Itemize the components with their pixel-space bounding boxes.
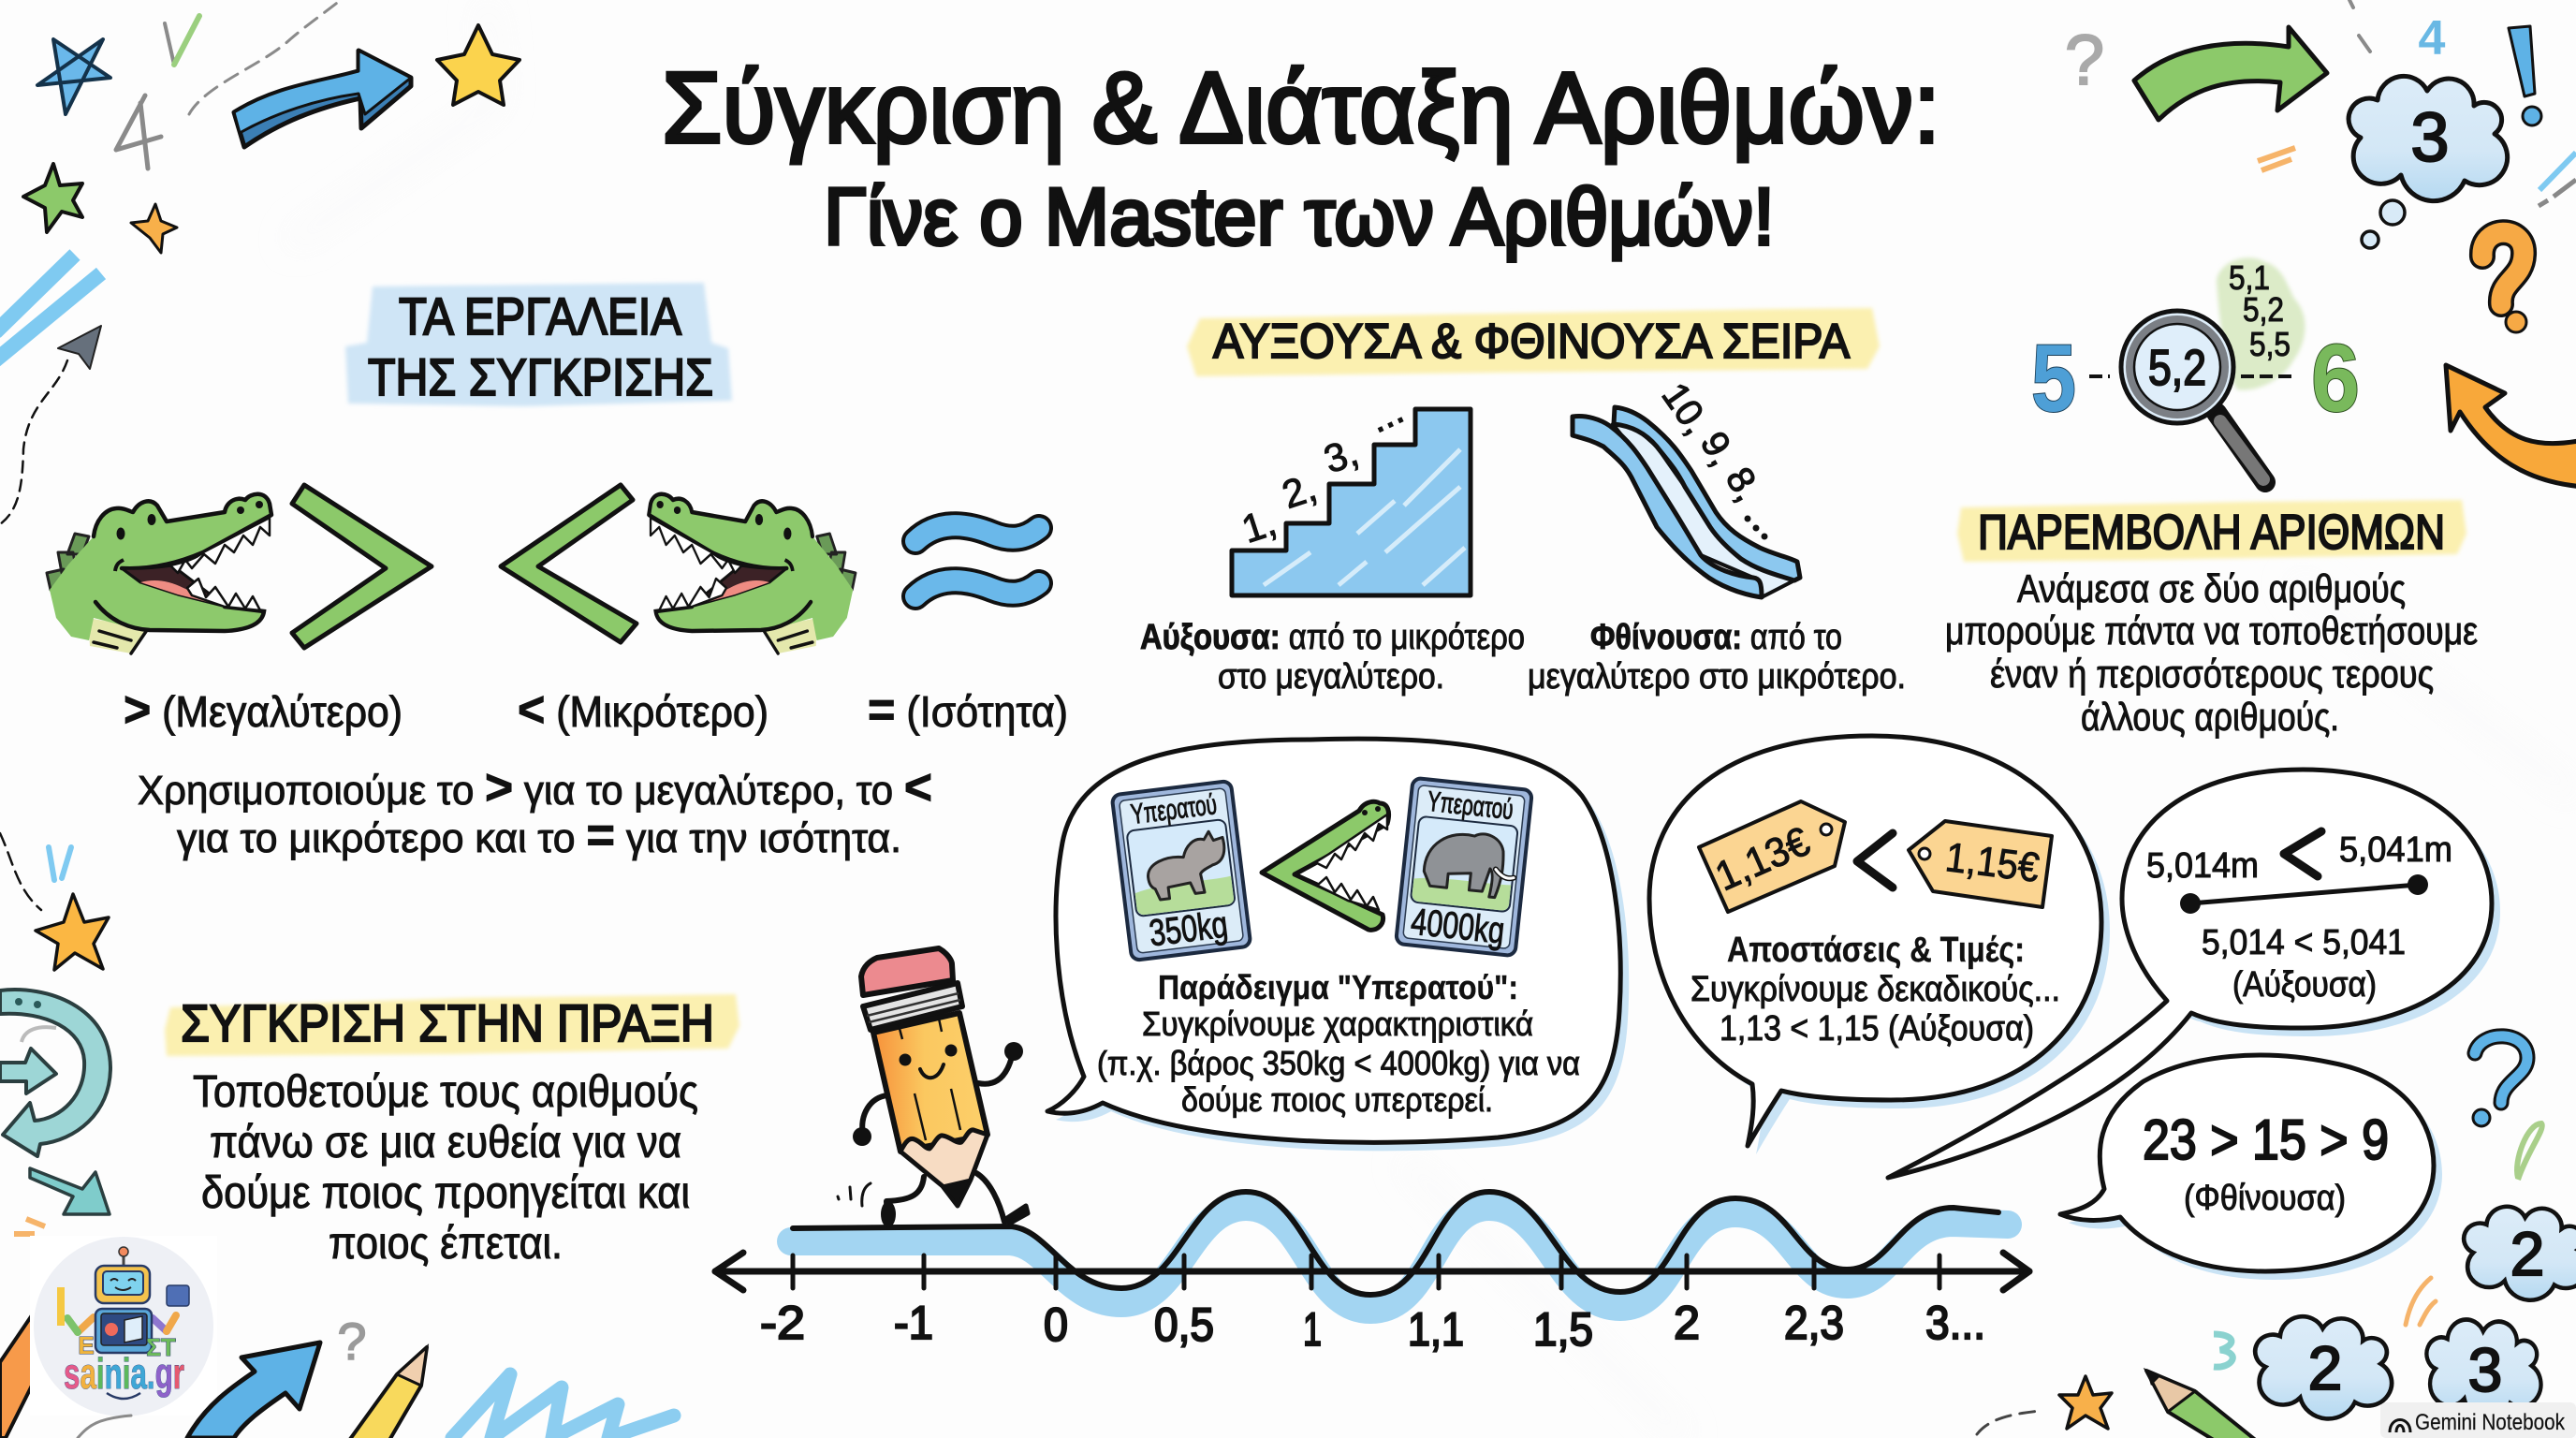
chart: number line with wave <box>715 1192 2029 1356</box>
text: practice explanation: δούμε ποιος προηγείται και <box>201 1168 690 1218</box>
text: interpolation explanation: Ανάμεσα σε δύο αριθμούς <box>2017 566 2406 610</box>
text: ascending <box>1140 618 1525 697</box>
bubble text <box>1690 931 2060 1049</box>
text: interpolation explanation <box>1945 566 2478 739</box>
teal squiggle <box>2214 1334 2232 1367</box>
numbers in blob: 5,5 <box>2249 325 2291 363</box>
text: practice explanation <box>193 1067 698 1269</box>
icon: orange star <box>131 204 177 253</box>
bubble text <box>2202 923 2406 1005</box>
heading: tools: ΤΗΣ ΣΥΓΚΡΙΣΗΣ <box>368 347 713 406</box>
axis labels: 2,3 <box>1784 1297 1844 1349</box>
icon: blue arrow <box>234 51 411 147</box>
text: ascending: στο μεγαλύτερο. <box>1218 657 1444 697</box>
heading: tools <box>345 283 732 406</box>
bubble text: 1,13 < 1,15 (Αύξουσα) <box>1720 1009 2034 1049</box>
icon: green star <box>23 164 82 232</box>
text: practice explanation: ποιος έπεται. <box>329 1219 563 1269</box>
icon: staircase <box>1232 388 1471 595</box>
card: elephant <box>1396 778 1532 956</box>
decorations: bottom left <box>78 1312 674 1438</box>
icon: orange question mark <box>2482 232 2526 332</box>
robot <box>61 1247 189 1353</box>
icon: number six: 6 <box>2311 325 2360 432</box>
axis labels: -1 <box>894 1297 933 1349</box>
orange dashes <box>14 1219 45 1234</box>
callout: distances and prices bubble <box>1649 736 2110 1154</box>
icon: blue question mark <box>2473 1036 2527 1126</box>
bubble text: Αποστάσεις & Τιμές: <box>1727 931 2025 970</box>
black wave <box>793 1192 1998 1295</box>
price tag left: 1,13€ <box>1709 818 1816 900</box>
axis labels <box>760 1297 1985 1356</box>
icon: crocodile facing left <box>649 493 856 653</box>
icon: green arrow <box>2134 27 2327 120</box>
icon: teal arrow <box>30 1168 110 1214</box>
text: interpolation explanation: μπορούμε πάντα να τοποθετήσουμε <box>1945 609 2478 653</box>
panel: ascending and descending order <box>1140 308 1906 697</box>
icon: magnifier <box>2121 311 2265 482</box>
segment comparison: 5,014m <box>2146 846 2259 886</box>
text: ascending: Αύξουσα: από το μικρότερο <box>1140 618 1525 657</box>
text: practice explanation: Τοποθετούμε τους αριθμούς <box>193 1067 698 1117</box>
icon: staircase: 1, <box>1237 499 1281 551</box>
logo: sainia.gr: ΣΤ <box>146 1333 176 1361</box>
less-than sign <box>1857 833 1893 888</box>
icon: crocodile jaws less-than <box>1262 801 1389 930</box>
blue wave <box>791 1207 2008 1310</box>
bubble text: (Φθίνουσα) <box>2184 1179 2346 1218</box>
axis labels: 2 <box>1674 1297 1700 1349</box>
numbers in blob: 5,1 <box>2229 258 2270 297</box>
panel: comparison in practice <box>165 993 739 1269</box>
icon: greater-than sign <box>292 485 432 648</box>
axis labels: 0 <box>1044 1299 1068 1351</box>
text: interpolation explanation: έναν ή περισσότερους τερους <box>1990 652 2434 696</box>
icon: cloud two right: 2 <box>2510 1219 2544 1288</box>
bubble text: (π.χ. βάρος 350kg < 4000kg) για να <box>1097 1044 1580 1082</box>
thought bubbles <box>2362 200 2405 248</box>
icon: paper plane <box>58 326 101 369</box>
card: elephant: Υπερατού <box>1426 786 1515 826</box>
icon: blue arrow <box>187 1343 320 1438</box>
heading: order: ΑΥΞΟΥΣΑ & ΦΘΙΝΟΥΣΑ ΣΕΙΡΑ <box>1213 315 1850 369</box>
text: symbols explanation <box>138 759 932 863</box>
bubble text: 5,014 < 5,041 <box>2202 923 2406 962</box>
price tag right: 1,15€ <box>1943 834 2042 891</box>
watermark: Gemini Notebook <box>2380 1402 2576 1438</box>
icon: crocodile facing right <box>47 493 271 653</box>
bubble text: Συγκρίνουμε χαρακτηριστικά <box>1142 1005 1533 1043</box>
dashed curve <box>1977 1411 2041 1434</box>
text: descending: μεγαλύτερο στο μικρότερο. <box>1528 657 1906 697</box>
text: symbols explanation: για το μικρότερο και το = για την ισότητα. <box>177 807 901 863</box>
heading: interpolation: ΠΑΡΕΜΒΟΛΗ ΑΡΙΘΜΩΝ <box>1978 506 2445 560</box>
card: rhino: 350kg <box>1147 904 1230 954</box>
callout: descending order bubble <box>2060 1055 2442 1280</box>
icon: number five: 5 <box>2031 325 2076 432</box>
dashed path <box>189 0 341 114</box>
bubble text <box>2143 1108 2389 1218</box>
icon: green blob <box>2217 257 2305 390</box>
logo: sainia.gr <box>30 1236 217 1416</box>
segment comparison: 5,041m <box>2339 830 2452 870</box>
axis labels: 0,5 <box>1154 1299 1214 1351</box>
icon: cloud three bottom: 3 <box>2468 1335 2502 1404</box>
icon: cloud two bottom: 2 <box>2308 1333 2342 1402</box>
icon: blue star <box>37 39 110 114</box>
icon: staircase: ... <box>1362 388 1410 441</box>
icon: slide: 8, <box>1718 461 1769 508</box>
green squiggle <box>2517 1123 2542 1180</box>
numbers in blob <box>2229 258 2291 363</box>
icon: orange arrow <box>2446 365 2576 487</box>
icon: teal cycle arrows <box>0 990 110 1156</box>
price tag left <box>1699 801 1845 912</box>
icon: cloud two bottom <box>2255 1316 2392 1418</box>
decorations: top right <box>2065 0 2576 487</box>
dashed curve <box>0 360 67 524</box>
orange ticks <box>2406 1278 2436 1325</box>
icon: less-than sign <box>501 485 637 642</box>
icon: orange star <box>36 894 109 970</box>
axis labels: 1 <box>1303 1303 1322 1356</box>
callout: infantry example bubble <box>1047 739 1629 1151</box>
bubble text: (Αύξουσα) <box>2232 965 2377 1005</box>
axis labels: -2 <box>760 1297 805 1349</box>
symbol labels: = (Ισότητα) <box>868 682 1068 738</box>
icon: orange star <box>2059 1376 2112 1429</box>
callout: distance comparison bubble <box>1888 770 2500 1178</box>
title <box>662 51 1940 262</box>
symbol labels: > (Μεγαλύτερο) <box>124 682 402 738</box>
icon: exclamation mark <box>2509 26 2541 125</box>
price tag right <box>1909 821 2052 907</box>
axis labels: 1,5 <box>1533 1303 1593 1356</box>
icon: orange pencil <box>0 1315 32 1438</box>
icon: staircase: 2, <box>1277 465 1322 517</box>
icon: cloud three bottom <box>2426 1320 2541 1419</box>
title: Σύγκριση & Διάταξη Αριθμών: <box>662 51 1940 164</box>
icon: magnifier: 5,2 <box>2148 340 2206 396</box>
icon: walking pencil character <box>838 948 1028 1227</box>
blue scribble <box>452 1374 674 1438</box>
logo: sainia.gr: Ε <box>78 1331 95 1359</box>
dashed curve <box>0 833 41 910</box>
numbers in blob: 5,2 <box>2243 290 2284 329</box>
decorations: left middle <box>0 833 110 1438</box>
icon: slide <box>1573 375 1800 597</box>
panel: number interpolation <box>1945 257 2478 739</box>
decorations: bottom right <box>1977 1036 2576 1438</box>
bubble text: δούμε ποιος υπερτερεί. <box>1181 1080 1493 1119</box>
icon: yellow star <box>437 25 520 105</box>
axis labels: 3... <box>1925 1297 1985 1349</box>
text: descending: Φθίνουσα: από το <box>1590 618 1842 657</box>
small doodles: 4 <box>2419 11 2446 66</box>
icon: yellow pencil <box>348 1347 427 1438</box>
title: Γίνε ο Master των Αριθμών! <box>824 172 1775 262</box>
blue streaks <box>0 255 101 360</box>
sketch number and check <box>116 16 199 169</box>
card: elephant: 4000kg <box>1409 902 1506 952</box>
axis labels: 1,1 <box>1408 1303 1464 1356</box>
segment comparison <box>2146 830 2452 914</box>
blue ticks <box>49 847 71 880</box>
card: rhino: Υπερατού <box>1129 789 1219 830</box>
text: descending <box>1528 618 1906 697</box>
bubble text: Συγκρίνουμε δεκαδικούς... <box>1690 970 2060 1009</box>
bubble text: Παράδειγμα "Υπερατού": <box>1158 968 1518 1006</box>
text: interpolation explanation: άλλους αριθμούς. <box>2081 695 2339 739</box>
icon: cloud two right <box>2464 1207 2576 1300</box>
logo: sainia.gr: sainia.gr <box>64 1349 184 1398</box>
icon: staircase: 3, <box>1319 430 1363 481</box>
icon: green pencil <box>2146 1371 2258 1438</box>
icon: gray question mark: ? <box>337 1312 367 1371</box>
heading: tools: ΤΑ ΕΡΓΑΛΕΙΑ <box>399 286 682 345</box>
bubble text <box>1097 968 1580 1119</box>
card: rhino <box>1112 781 1251 961</box>
text: symbols explanation: Χρησιμοποιούμε το > για το μεγαλύτερο, το < <box>138 759 932 815</box>
icon: equals waves <box>915 525 1039 596</box>
number line dashes <box>2089 374 2295 378</box>
icon: cloud three <box>2349 76 2508 201</box>
icon: slide: 10, <box>1654 375 1718 442</box>
symbol labels <box>124 682 1068 738</box>
icon: slide: 9, <box>1692 425 1744 473</box>
text: practice explanation: πάνω σε μια ευθεία για να <box>210 1118 681 1167</box>
small doodles <box>2258 0 2576 206</box>
symbol labels: < (Μικρότερο) <box>518 682 768 738</box>
icon: gray question mark: ? <box>2065 21 2104 100</box>
heading: practice: ΣΥΓΚΡΙΣΗ ΣΤΗΝ ΠΡΑΞΗ <box>181 993 714 1052</box>
decorations: top left <box>0 0 520 524</box>
bubble text: 23 > 15 > 9 <box>2143 1108 2389 1171</box>
axis <box>715 1253 2029 1290</box>
icon: cloud three: 3 <box>2410 98 2450 176</box>
panel: tools of comparison <box>47 283 1068 863</box>
